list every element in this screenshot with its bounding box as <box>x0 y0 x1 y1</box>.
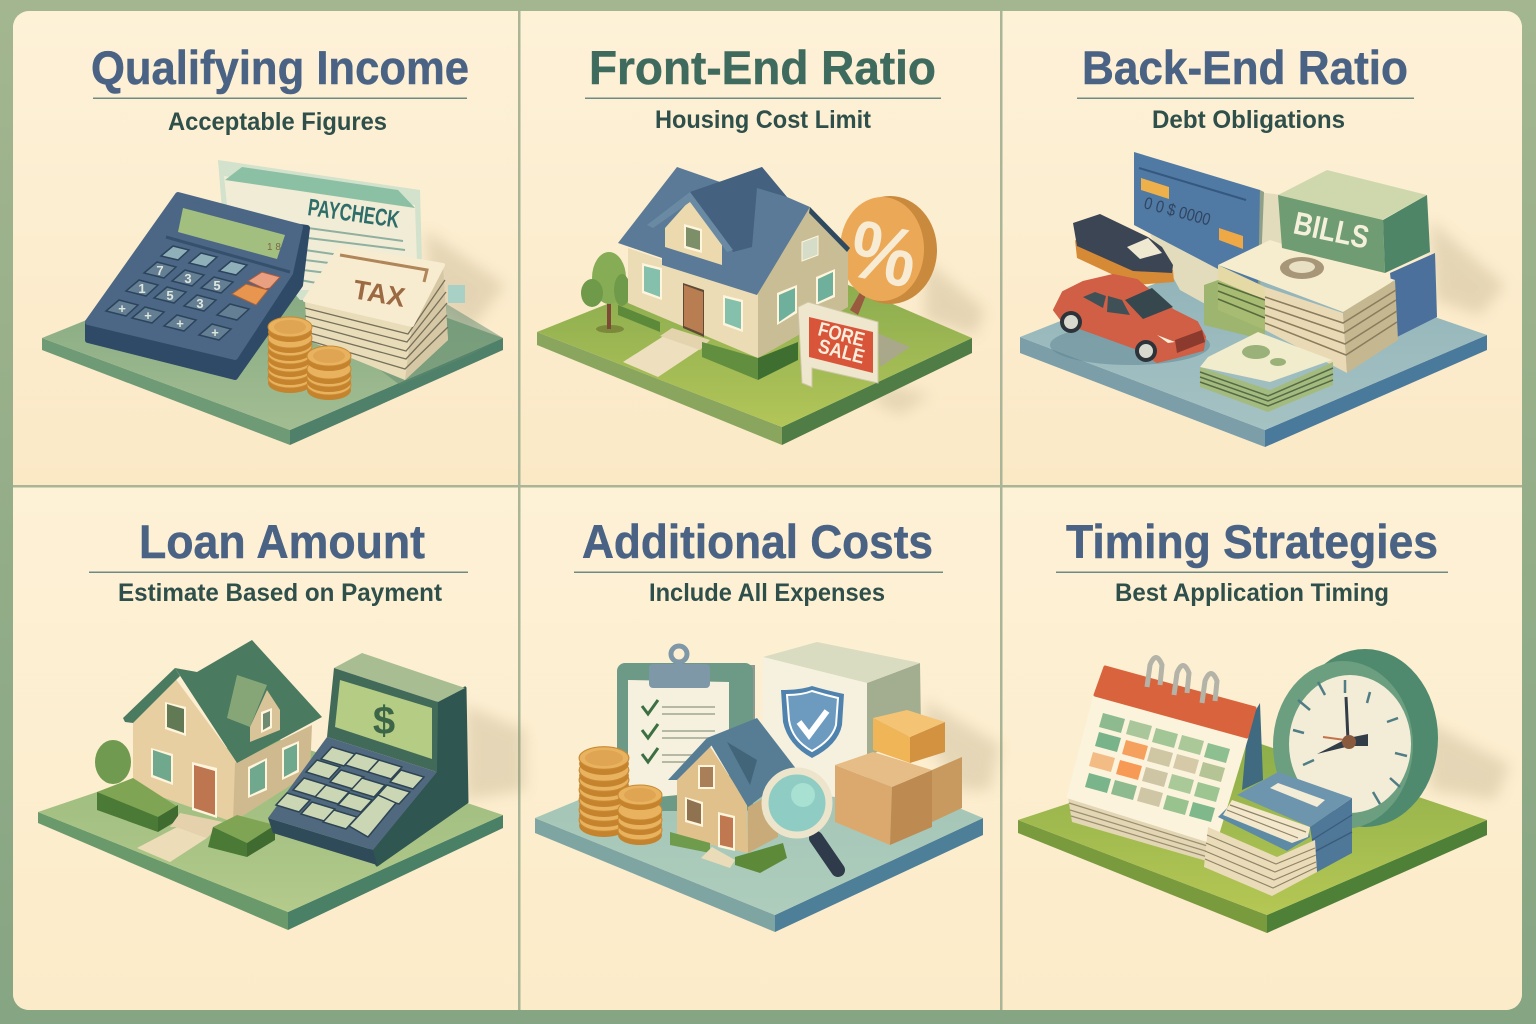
icon: for sale sign <box>798 302 878 387</box>
subheading: Include All Expenses: Include All Expenses <box>649 579 885 607</box>
icon: tax papers: TAX <box>351 274 407 313</box>
illustration: house and payment calculator <box>38 640 525 930</box>
icon: paycheck <box>218 160 423 300</box>
icon: small house <box>668 718 797 873</box>
subheading: Estimate Based on Payment: Estimate Based on Payment <box>118 579 443 607</box>
heading: Qualifying Income: Qualifying Income <box>91 41 469 94</box>
panel: Qualifying Income <box>42 41 505 445</box>
icon: calculator: 5 <box>166 288 174 303</box>
icon: wall clock <box>1273 649 1438 829</box>
icon: tax papers <box>305 248 465 380</box>
icon: van <box>1073 214 1174 285</box>
icon: clipboard <box>617 646 755 811</box>
icon: calculator <box>88 195 307 377</box>
icon: red car <box>1050 275 1210 365</box>
subheading: Best Application Timing: Best Application Timing <box>1115 579 1389 607</box>
illustration: calendar, clock, books <box>1018 649 1510 933</box>
icon: for sale sign: SALE <box>816 336 867 369</box>
heading: Loan Amount: Loan Amount <box>139 515 425 568</box>
icon: bush <box>95 740 131 784</box>
icon: insurance document with shield <box>763 642 921 800</box>
heading: Additional Costs: Additional Costs <box>582 515 933 568</box>
illustration: calculator, paycheck, tax papers, coins <box>42 160 505 445</box>
icon: bills box <box>1278 170 1430 273</box>
icon: tree <box>581 252 630 333</box>
icon: payment calculator <box>268 653 467 865</box>
panel: Additional Costs <box>535 515 1000 932</box>
icon: calculator: 3 <box>196 296 204 311</box>
icon: magnifying glass <box>765 771 838 870</box>
icon: calculator: 5 <box>213 278 221 293</box>
icon: house <box>618 167 850 380</box>
subheading: Debt Obligations: Debt Obligations <box>1152 106 1345 134</box>
icon: house <box>97 640 322 862</box>
subheading: Housing Cost Limit: Housing Cost Limit <box>655 106 872 134</box>
heading: Back-End Ratio: Back-End Ratio <box>1082 41 1408 94</box>
icon: payment calculator: $ <box>373 699 395 743</box>
subheading: Acceptable Figures: Acceptable Figures <box>168 108 387 136</box>
panel: Timing Strategies <box>1018 515 1510 933</box>
icon: desk calendar <box>1068 658 1263 862</box>
panel: Loan Amount <box>38 515 525 930</box>
icon: calculator: + <box>211 325 219 340</box>
icon: paycheck: PAYCHECK <box>306 194 401 234</box>
icon: calculator: + <box>118 301 126 316</box>
icon: credit card: 0 0 $ 0000 <box>1142 194 1213 229</box>
heading: Timing Strategies: Timing Strategies <box>1066 515 1438 568</box>
icon: calculator: 3 <box>184 271 192 286</box>
illustration: clipboard, shield document, boxes, house, coins, magnifier <box>535 642 1000 932</box>
icon: calculator: + <box>144 308 152 323</box>
icon: for sale sign: FORE <box>816 319 867 352</box>
heading: Front-End Ratio: Front-End Ratio <box>589 41 936 94</box>
icon: coin stacks <box>579 747 662 845</box>
icon: calculator: 1 8 <box>267 242 281 253</box>
icon: cash stacks <box>1200 240 1437 412</box>
icon: bills box: BILLS <box>1291 205 1372 256</box>
panel: Back-End Ratio <box>1020 41 1505 447</box>
illustration: house, percent badge, for sale sign <box>537 167 985 445</box>
panel: Front-End Ratio <box>537 41 985 445</box>
icon: stacked books <box>1204 772 1352 896</box>
icon: credit card <box>1134 152 1264 290</box>
icon: calculator: 1 <box>138 281 146 296</box>
icon: cardboard boxes <box>835 710 962 845</box>
icon: calculator: + <box>176 316 184 331</box>
illustration: credit card, cars, bills, cash stacks <box>1020 152 1505 447</box>
icon: coin stacks <box>268 317 351 400</box>
icon: calculator: 7 <box>156 263 164 278</box>
icon: percent badge: % <box>842 203 925 306</box>
